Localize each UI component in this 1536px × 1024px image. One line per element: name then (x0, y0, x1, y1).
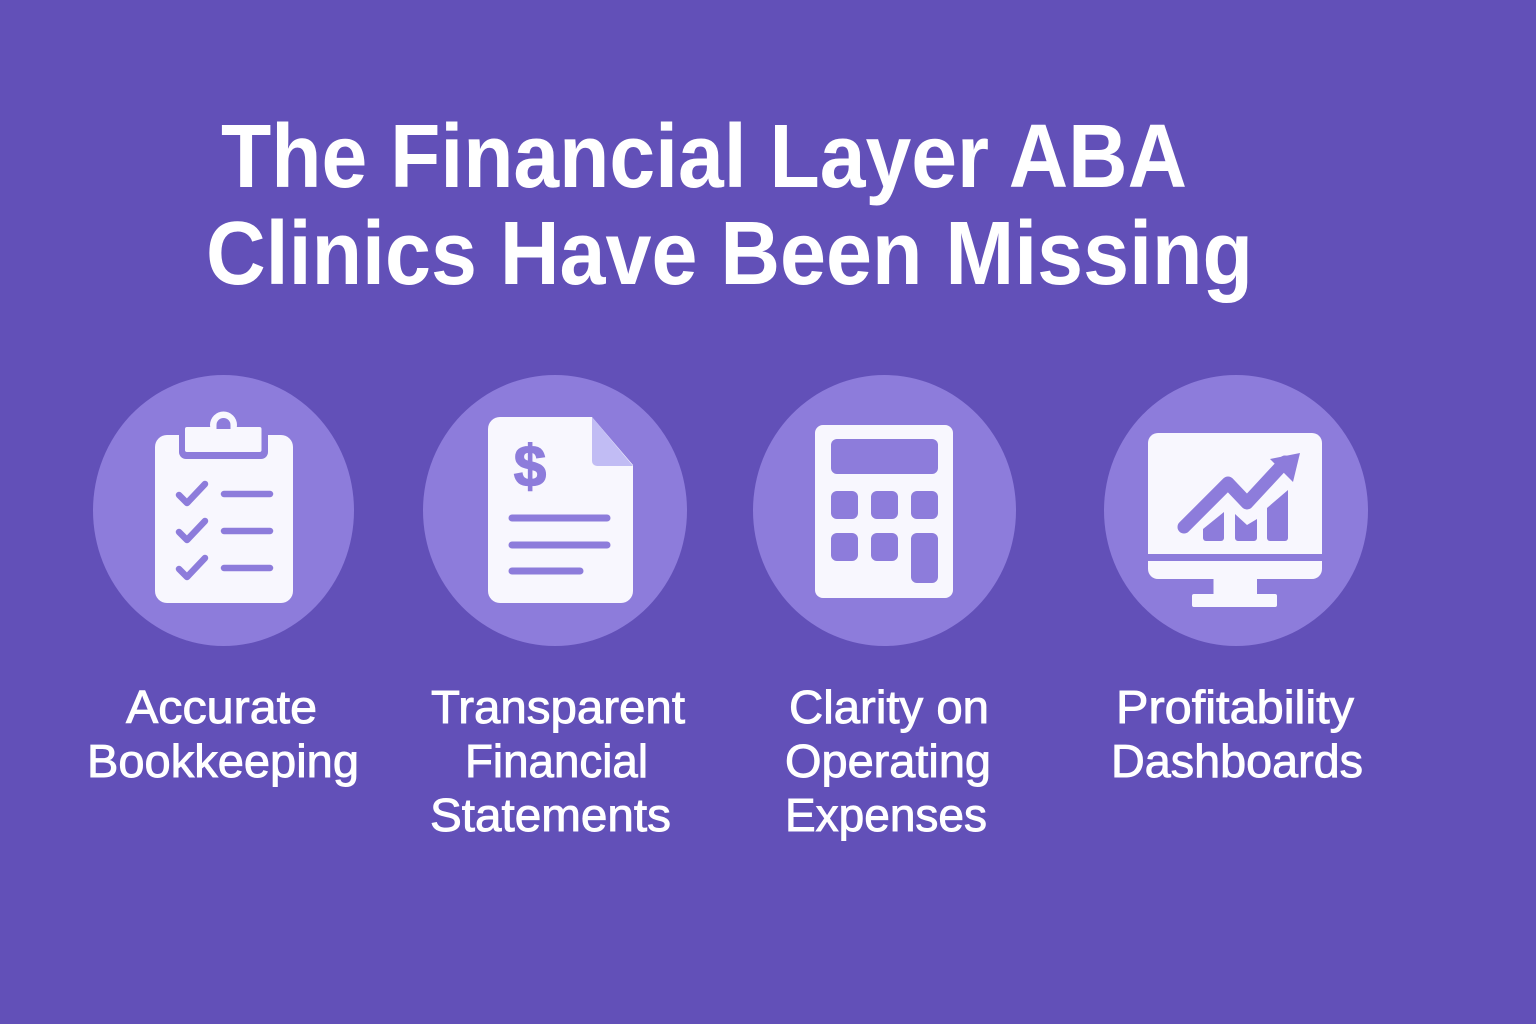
label: profitability dashboards: Dashboards (1111, 735, 1363, 787)
icon: clipboard checklist (93, 375, 354, 646)
icon: calculator (753, 375, 1016, 646)
title: Clinics Have Been Missing (206, 204, 1253, 304)
icon: financial document: $ (514, 434, 546, 499)
label: accurate bookkeeping: Bookkeeping (87, 735, 359, 787)
label: transparent financial statements: Financial (465, 735, 648, 787)
icon: financial document (423, 375, 687, 646)
panel: transparent financial statements (423, 375, 687, 841)
panel: profitability dashboards (1104, 375, 1368, 787)
label: profitability dashboards: Profitability (1116, 681, 1354, 733)
label: clarity on operating expenses (785, 681, 991, 841)
label: accurate bookkeeping: Accurate (126, 681, 317, 733)
label: clarity on operating expenses: Operating (785, 735, 991, 787)
title (206, 107, 1253, 304)
icon: monitor with growth chart (1104, 375, 1368, 646)
panel: clarity on operating expenses (753, 375, 1016, 841)
panel: accurate bookkeeping (87, 375, 359, 787)
label: transparent financial statements: Statements (430, 789, 671, 841)
title: The Financial Layer ABA (221, 107, 1187, 207)
label: transparent financial statements: Transparent (431, 681, 685, 733)
label: clarity on operating expenses: Expenses (785, 789, 987, 841)
label: clarity on operating expenses: Clarity on (789, 681, 989, 733)
label: profitability dashboards (1111, 681, 1363, 787)
label: accurate bookkeeping (87, 681, 359, 787)
label: transparent financial statements (430, 681, 685, 841)
